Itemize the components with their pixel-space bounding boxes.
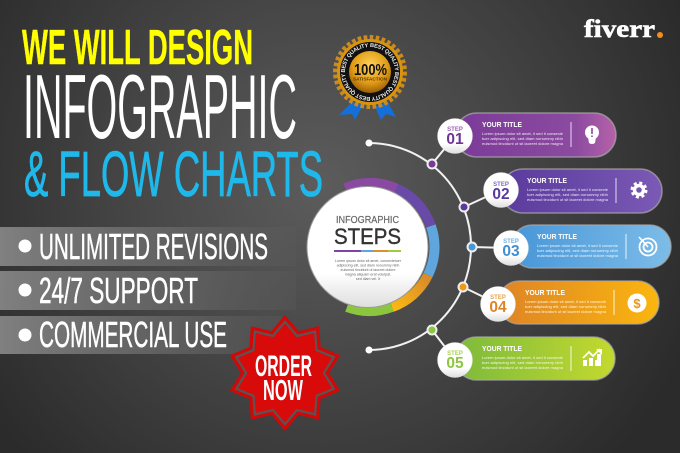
fiverr logo: fiverr (584, 16, 655, 43)
step 02 panel: tuer adipiscing elit, sed diam nonummy nibh (527, 193, 608, 197)
central circle: infographic steps: euismod tincidunt ut laoreet dolore (341, 268, 395, 272)
step nodes (428, 160, 476, 334)
step 01 panel: Lorem ipsum dolor sit amet, it sed it consecte (482, 132, 563, 136)
central circle: infographic steps: INFOGRAPHIC (336, 215, 399, 226)
step 02 panel: 02 (492, 186, 510, 203)
quality badge (333, 35, 407, 120)
feature bar: commercial use (0, 314, 282, 355)
heading: flow charts: & FLOW CHARTS (24, 138, 323, 210)
icon: dollar coin: $ (633, 296, 641, 311)
step 02 panel: euismod tincidunt ut sit laoreet dolore magna (527, 198, 609, 202)
step 04 panel: STEP (490, 295, 506, 301)
infographic canvas: INFOGRAPHIC (23, 57, 297, 158)
order now starburst (230, 315, 340, 431)
quality badge: BEST QUALITY BEST QUALITY BEST QUALITY BEST QUALITY (341, 43, 399, 101)
feature bar: unlimited revisions (0, 226, 296, 267)
step 01 panel: YOUR TITLE (482, 122, 522, 129)
step 04 panel (480, 281, 659, 324)
feature bar: unlimited revisions: UNLIMITED REVISIONS (39, 226, 268, 267)
quality badge: 100% (354, 62, 387, 79)
connector curve (366, 136, 511, 360)
step 03 panel: tuer adipiscing elit, sed diam nonummy nibh (537, 249, 618, 253)
central circle: infographic steps (307, 183, 435, 311)
step 01 panel (438, 113, 616, 157)
step 04 panel: YOUR TITLE (525, 290, 565, 297)
step 02 panel (484, 169, 662, 213)
icon: target (639, 237, 656, 256)
feature bar: support: 24/7 SUPPORT (39, 270, 198, 311)
heading: we will design: WE WILL DESIGN (22, 21, 253, 75)
step 01 panel: tuer adipiscing elit, sed diam nonummy nibh (482, 137, 563, 141)
central circle: infographic steps: STEPS (334, 224, 401, 249)
order now starburst: ORDER (255, 350, 312, 383)
icon: dollar coin (628, 294, 646, 312)
icon: growth chart (583, 349, 602, 366)
step 05 panel: euismod tincidunt ut sit laoreet dolore magna (482, 366, 564, 370)
order now starburst: NOW (263, 375, 303, 407)
step 04 panel: tuer adipiscing elit, sed diam nonummy nibh (525, 305, 606, 309)
step 03 panel: Lorem ipsum dolor sit amet, it sed it consecte (537, 244, 618, 248)
step 03 panel (494, 225, 671, 268)
central circle: infographic steps: adipiscing elit, sed diam nonummy nibh (337, 264, 399, 268)
step 01 panel: euismod tincidunt ut sit laoreet dolore magna (482, 142, 564, 146)
feature bar: commercial use: COMMERCIAL USE (39, 314, 227, 355)
step 04 panel: 04 (489, 299, 507, 316)
step 05 panel: tuer adipiscing elit, sed diam nonummy nibh (482, 361, 563, 365)
central circle: infographic steps: magna aliquam erat volutpat. (345, 272, 391, 276)
central circle: infographic steps: Lorem ipsum dolor sit amet, consectetuer (335, 259, 402, 263)
step 05 panel: 05 (446, 355, 464, 372)
step 05 panel: Lorem ipsum dolor sit amet, it sed it consecte (482, 356, 563, 360)
central circle: infographic steps: sed diam vel. It (356, 277, 380, 281)
quality badge: SATISFACTION (353, 76, 388, 82)
step 04 panel: euismod tincidunt ut sit laoreet dolore magna (525, 310, 607, 314)
step 01 panel: STEP (447, 127, 463, 133)
icon: gear (632, 183, 646, 197)
step 01 panel: 01 (446, 131, 464, 148)
step 03 panel: 03 (502, 243, 520, 260)
step 05 panel: YOUR TITLE (482, 346, 522, 353)
step 04 panel: Lorem ipsum dolor sit amet, it sed it consecte (525, 300, 606, 304)
step 02 panel: STEP (493, 182, 509, 188)
step 03 panel: STEP (503, 239, 519, 245)
step 05 panel (438, 337, 615, 380)
step 02 panel: YOUR TITLE (527, 178, 567, 185)
icon: light bulb (585, 126, 599, 144)
step 03 panel: YOUR TITLE (537, 234, 577, 241)
step 05 panel: STEP (447, 351, 463, 357)
step 03 panel: euismod tincidunt ut sit laoreet dolore magna (537, 254, 619, 258)
step 02 panel: Lorem ipsum dolor sit amet, it sed it consecte (527, 188, 608, 192)
